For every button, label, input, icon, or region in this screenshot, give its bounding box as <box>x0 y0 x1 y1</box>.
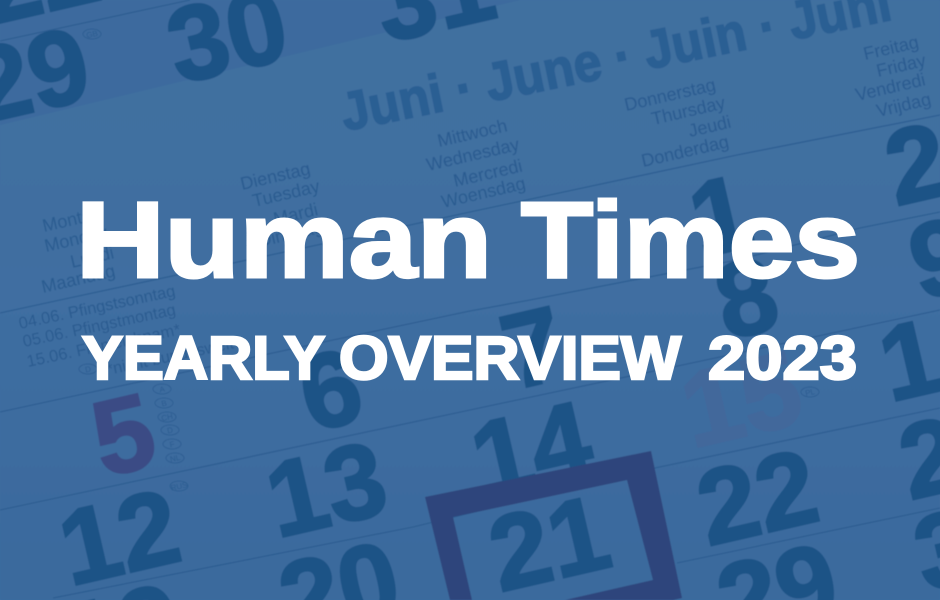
country badges: F <box>169 440 176 449</box>
weekday labels: Dinsdag <box>256 217 325 251</box>
calendar date numbers: 15 <box>671 329 812 470</box>
holiday list: *nicht bundesweit <box>105 334 236 379</box>
calendar date numbers: 7 <box>491 284 575 412</box>
country badges: NL <box>169 453 182 464</box>
weekday labels: Thursday <box>649 93 727 129</box>
subtitle: Yearly Overview 2023: OVERVIEW <box>339 324 681 392</box>
country badges: A <box>159 384 166 394</box>
weekday labels: Mardi <box>271 199 320 229</box>
calendar date numbers: 14 <box>461 379 602 520</box>
weekday labels: Donnerstag <box>622 74 718 115</box>
weekday labels: Tuesday <box>250 176 322 211</box>
weekday labels: Lundi <box>68 243 116 272</box>
holiday list <box>17 282 236 379</box>
country badges: PL <box>804 387 816 398</box>
country badges <box>79 29 819 493</box>
weekday labels <box>39 32 933 297</box>
country badges: D <box>166 425 174 435</box>
country badges: B <box>161 399 168 408</box>
country badges: D <box>84 364 92 374</box>
country badges: RUS <box>170 480 188 493</box>
subtitle: Yearly Overview 2023: 2023 <box>708 324 857 392</box>
weekday labels: Donderdag <box>639 131 731 171</box>
subtitle: Yearly Overview 2023 <box>82 324 857 392</box>
holiday list: 05.06. Pfingstmontag <box>21 301 177 351</box>
weekday labels: Jeudi <box>686 112 733 141</box>
date highlight frame around 21 <box>425 451 682 600</box>
weekday labels: Montag <box>40 203 103 236</box>
weekday labels: Mittwoch <box>435 115 509 151</box>
weekday labels: Dienstag <box>238 158 312 194</box>
weekday labels: Vendredi <box>853 69 927 105</box>
country badges: CH <box>161 412 174 423</box>
calendar date numbers: 13 <box>256 419 397 560</box>
weekday labels: Maandag <box>39 261 117 297</box>
calendar date numbers: 1 <box>679 152 763 280</box>
weekday labels: Friday <box>874 50 928 81</box>
weekday labels: Wednesday <box>424 134 521 175</box>
weekday labels: Woensdag <box>439 173 527 212</box>
weekday labels: Vrijdag <box>874 89 933 121</box>
country badges: GB <box>86 29 99 40</box>
weekday labels: Mercredi <box>451 156 524 191</box>
subtitle: Yearly Overview 2023: YEARLY <box>82 324 325 392</box>
calendar date numbers: 6 <box>289 326 373 454</box>
holiday list: 04.06. Pfingstsonntag <box>17 282 177 333</box>
weekday labels: Freitag <box>861 32 920 64</box>
title: Human Times: Human <box>76 179 492 300</box>
calendar date numbers: 8 <box>705 234 789 362</box>
title: Human Times: Times <box>521 179 860 300</box>
weekday labels: Monday <box>42 222 109 256</box>
calendar date numbers: 22 <box>687 427 828 568</box>
calendar date numbers: 5 <box>82 371 166 499</box>
title: Human Times <box>76 179 860 300</box>
holiday list: 15.06. Fronleichnam* <box>25 321 183 371</box>
